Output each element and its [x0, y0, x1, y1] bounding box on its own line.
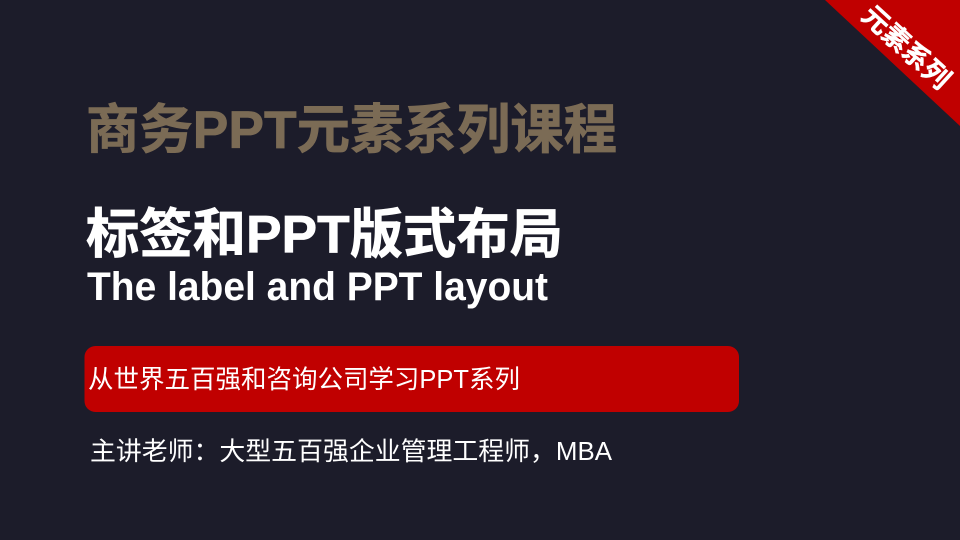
banner text: 从世界五百强和咨询公司学习PPT系列: [88, 365, 520, 394]
corner ribbon: [825, 0, 960, 126]
banner: series description: [84, 346, 739, 412]
heading: Chinese title: 标签和PPT版式布局: [86, 206, 563, 264]
ribbon triangle: [825, 0, 960, 126]
title: course series: 商务PPT元素系列课程: [86, 101, 617, 160]
banner background: [84, 346, 739, 412]
heading: English title: The label and PPT layout: [87, 265, 548, 309]
presenter text: 主讲老师：大型五百强企业管理工程师，MBA: [90, 437, 613, 466]
ribbon label: 元素系列: [856, 0, 956, 95]
